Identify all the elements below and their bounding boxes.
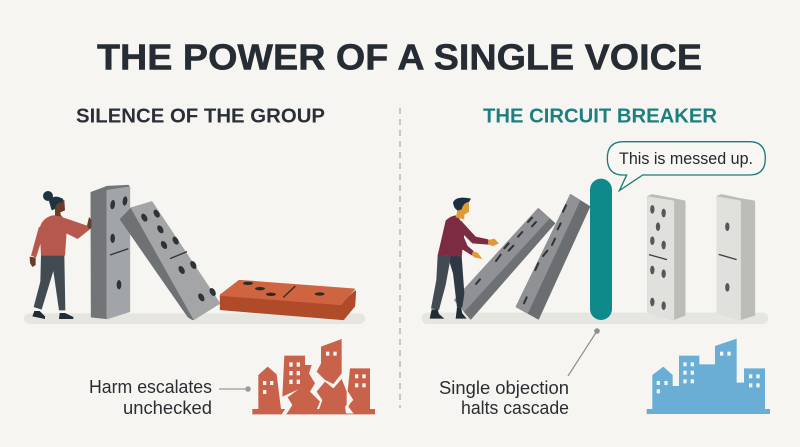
panel: silence of the group scene — [24, 186, 365, 324]
figure: woman pushing domino — [30, 191, 92, 319]
domino: standing grey — [91, 186, 129, 318]
panel: circuit breaker scene — [422, 142, 768, 324]
callout: single objection: halts cascade — [461, 398, 569, 418]
domino: falling grey — [121, 202, 219, 319]
domino: tilted B — [517, 195, 589, 319]
heading: silence of the group: SILENCE OF THE GROUP — [76, 106, 325, 128]
callout: single objection: Single objection — [439, 378, 569, 398]
speech bubble text: This is messed up. — [619, 149, 753, 168]
domino: tilted A — [455, 209, 554, 319]
domino: fallen orange — [221, 281, 355, 319]
callout: single objection — [439, 328, 600, 418]
ground shadow left — [24, 313, 365, 324]
callout: harm escalates — [89, 377, 251, 418]
icon: crumbling city — [252, 339, 375, 414]
ground shadow right — [422, 313, 768, 324]
figure: man stopping dominoes — [430, 198, 499, 319]
cracks — [282, 389, 298, 414]
domino: standing light one-one — [717, 195, 754, 319]
domino: standing light five-four — [648, 195, 685, 319]
icon: intact blue city — [647, 339, 770, 414]
speech bubble shape — [607, 142, 765, 191]
title: THE POWER OF A SINGLE VOICE — [97, 36, 702, 78]
callout: harm escalates: unchecked — [123, 398, 212, 418]
domino: teal circuit breaker — [590, 179, 612, 320]
heading: the circuit breaker: THE CIRCUIT BREAKER — [483, 106, 718, 128]
callout: harm escalates: Harm escalates — [89, 377, 212, 397]
